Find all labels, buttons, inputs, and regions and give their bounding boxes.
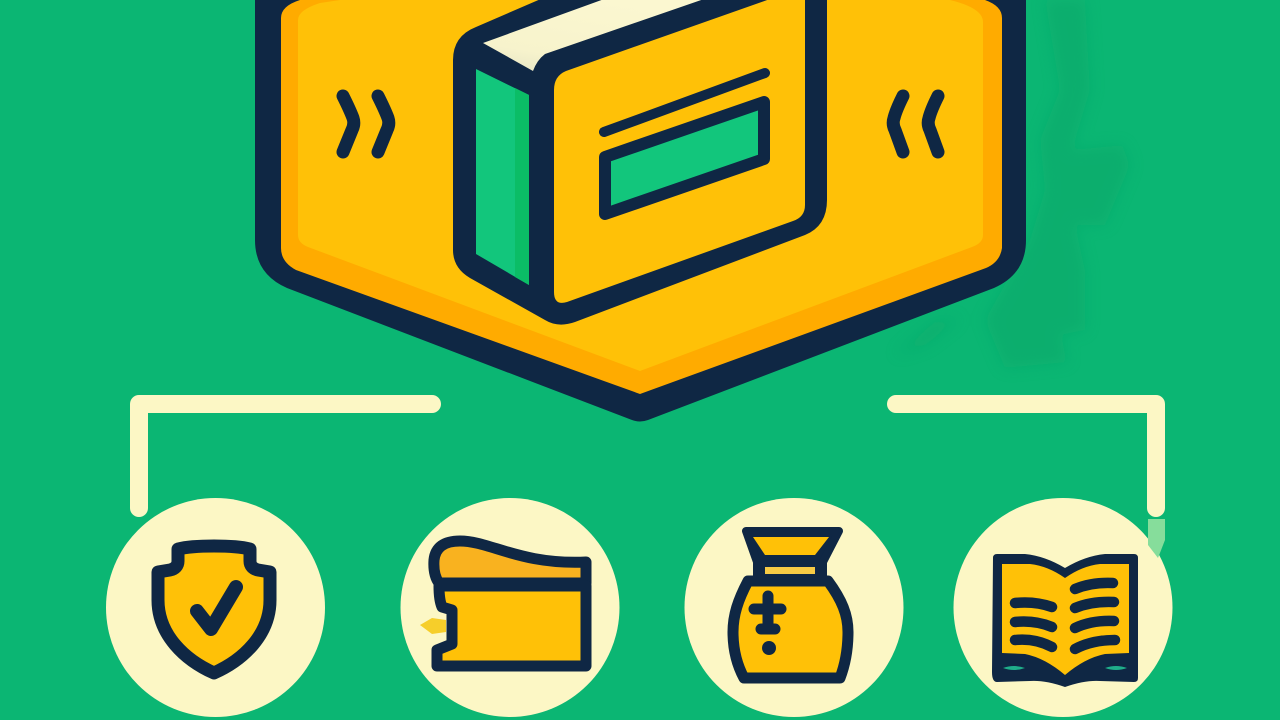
icon: open book: [992, 554, 1138, 687]
circle: shield: [106, 498, 325, 717]
box: [453, 0, 827, 325]
box outline: [453, 0, 827, 325]
circle background: [954, 498, 1172, 717]
box label line: [604, 73, 765, 132]
left connector: [139, 404, 432, 508]
connector fade over circle: [1148, 519, 1165, 558]
badge outline: [255, 0, 1026, 422]
right connector: [896, 404, 1156, 508]
box left face shade: [515, 88, 529, 285]
circle background: [400, 498, 620, 717]
badge yellow face: [298, 0, 983, 371]
central hexagon badge: [255, 0, 1026, 422]
box label: [605, 102, 764, 214]
left chevrons: [343, 96, 389, 152]
box left face: [476, 69, 529, 285]
icon: jar: [733, 531, 848, 678]
circle background: [684, 498, 904, 717]
right chevrons: [893, 96, 938, 152]
icon: wallet: [420, 541, 586, 666]
faint background silhouette: [895, 0, 1130, 368]
circle: open book: [954, 498, 1172, 717]
circle: jar: [684, 498, 904, 717]
icon: shield with check: [158, 546, 270, 673]
circle background: [106, 498, 325, 717]
box front face: [554, 0, 805, 303]
box top flap: [483, 0, 707, 71]
circle: wallet: [400, 498, 620, 717]
badge orange rim: [281, 0, 1002, 394]
